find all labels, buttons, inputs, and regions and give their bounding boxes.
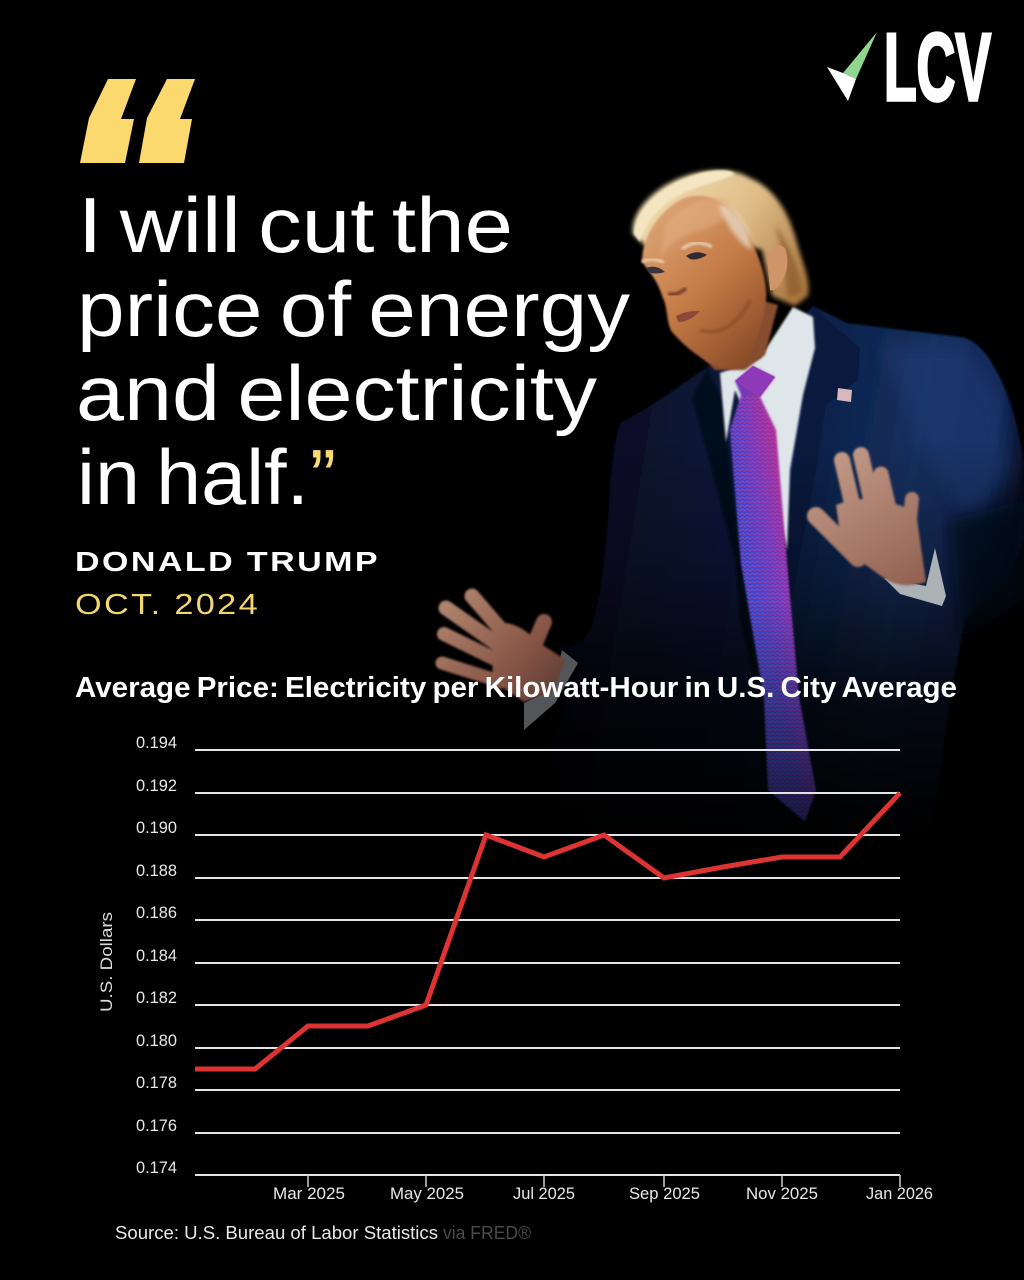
hair back [633,170,809,306]
x axis labels [273,1185,933,1203]
data line [195,793,900,1069]
american flag pin [837,388,852,402]
attribution date: OCT. 2024 [75,589,260,621]
x axis labels: Sep 2025 [629,1185,700,1203]
y axis labels: 0.190 [136,819,177,837]
forehead patch [660,197,730,258]
grid lines [195,750,900,1175]
left cuff [524,650,578,730]
photo: Donald Trump [442,170,1024,850]
tie [730,366,816,822]
logo: LCV [827,14,991,121]
shirt [720,307,815,550]
y axis labels: 0.192 [136,777,177,795]
line chart [97,734,933,1203]
source via: via FRED® [443,1222,531,1243]
attribution name: DONALD TRUMP [75,546,380,577]
suit jacket [563,305,1024,780]
quote text [76,181,630,521]
y axis labels: 0.184 [136,947,177,965]
x axis labels: May 2025 [390,1185,464,1203]
x axis labels: Jan 2026 [866,1185,933,1203]
y axis labels: 0.186 [136,904,177,922]
y axis labels: 0.176 [136,1117,177,1135]
x axis labels: Jul 2025 [513,1185,575,1203]
right hand [816,455,926,585]
y axis labels: 0.182 [136,989,177,1007]
x axis labels: Nov 2025 [746,1185,818,1203]
hair front swoop [634,170,735,242]
eyes, brows and mouth [646,267,665,274]
quote text: in half. [77,433,309,521]
neck [690,300,778,370]
y axis labels: 0.194 [136,734,177,752]
right cuff [884,548,946,606]
quote text: ” [310,433,336,521]
y axis labels: 0.174 [136,1159,177,1177]
y axis labels: 0.180 [136,1032,177,1050]
lapel shading [788,309,860,589]
icon: check mark [827,32,877,101]
y axis labels: 0.188 [136,862,177,880]
quote text: and electricity [76,349,597,437]
y axis labels: 0.178 [136,1074,177,1092]
quote text: I will cut the [78,181,513,269]
x axis labels: Mar 2025 [273,1185,345,1203]
left hand [442,596,566,702]
y axis labels [136,734,177,1177]
icon: opening quotation mark [80,79,195,163]
quote text: price of energy [77,265,630,353]
face [642,196,766,368]
chart title: Average Price: Electricity per Kilowatt-Hour in U.S. City Average [75,672,957,704]
source note: Source: U.S. Bureau of Labor Statistics [115,1222,438,1243]
ear [767,246,788,290]
y axis title: U.S. Dollars [97,912,116,1012]
